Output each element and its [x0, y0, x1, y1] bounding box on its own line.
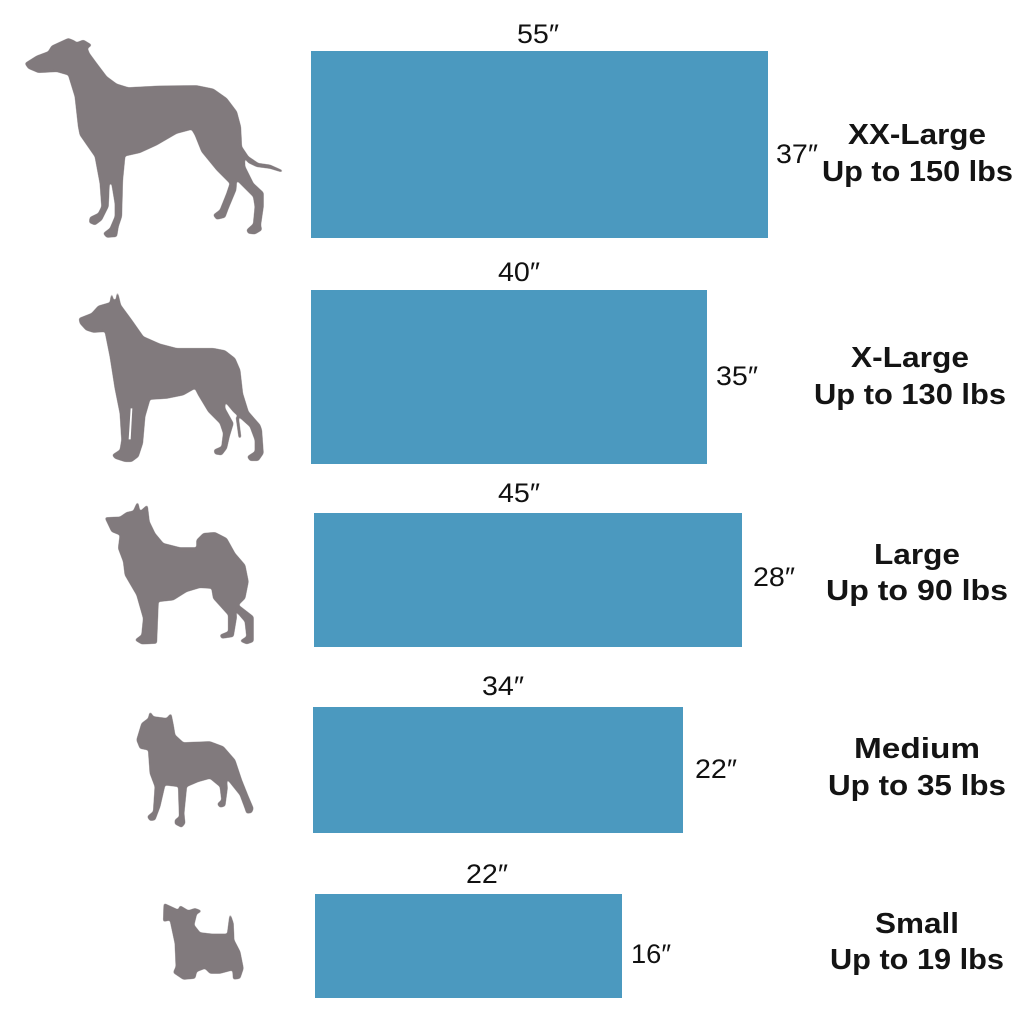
- row: X-Large: [79, 257, 1006, 464]
- depth label: 37″: [776, 139, 818, 169]
- weight limit: Up to 19 lbs: [830, 944, 1004, 976]
- icon: greyhound silhouette: [25, 38, 283, 237]
- weight limit: Up to 130 lbs: [814, 379, 1006, 411]
- depth label: 22″: [695, 754, 737, 784]
- size name: Large: [874, 539, 960, 571]
- row: Small: [163, 859, 1004, 998]
- width label: 34″: [482, 671, 524, 701]
- weight limit: Up to 150 lbs: [822, 156, 1013, 188]
- icon: great dane silhouette: [79, 291, 263, 462]
- bed size bar 34 by 22: [313, 707, 683, 833]
- bed size bar 22 by 16: [315, 894, 622, 998]
- bed size bar 45 by 28: [314, 513, 742, 647]
- depth label: 28″: [753, 562, 795, 592]
- weight limit: Up to 90 lbs: [826, 575, 1008, 607]
- size name: Medium: [854, 733, 980, 765]
- row: XX-Large: [25, 19, 1013, 238]
- width label: 45″: [498, 478, 540, 508]
- bed size bar 40 by 35: [311, 290, 707, 464]
- depth label: 16″: [631, 939, 671, 969]
- icon: pit bull silhouette: [137, 712, 253, 827]
- size name: X-Large: [851, 342, 969, 374]
- size name: Small: [875, 908, 959, 940]
- icon: spitz silhouette: [105, 502, 253, 644]
- width label: 40″: [498, 257, 540, 287]
- size name: XX-Large: [848, 119, 986, 151]
- width label: 22″: [466, 859, 508, 889]
- weight limit: Up to 35 lbs: [828, 770, 1006, 802]
- row: Large: [105, 478, 1008, 647]
- icon: scottish terrier silhouette: [163, 903, 243, 979]
- row: Medium: [137, 671, 1006, 833]
- width label: 55″: [517, 19, 559, 49]
- depth label: 35″: [716, 361, 758, 391]
- bed size bar 55 by 37: [311, 51, 768, 238]
